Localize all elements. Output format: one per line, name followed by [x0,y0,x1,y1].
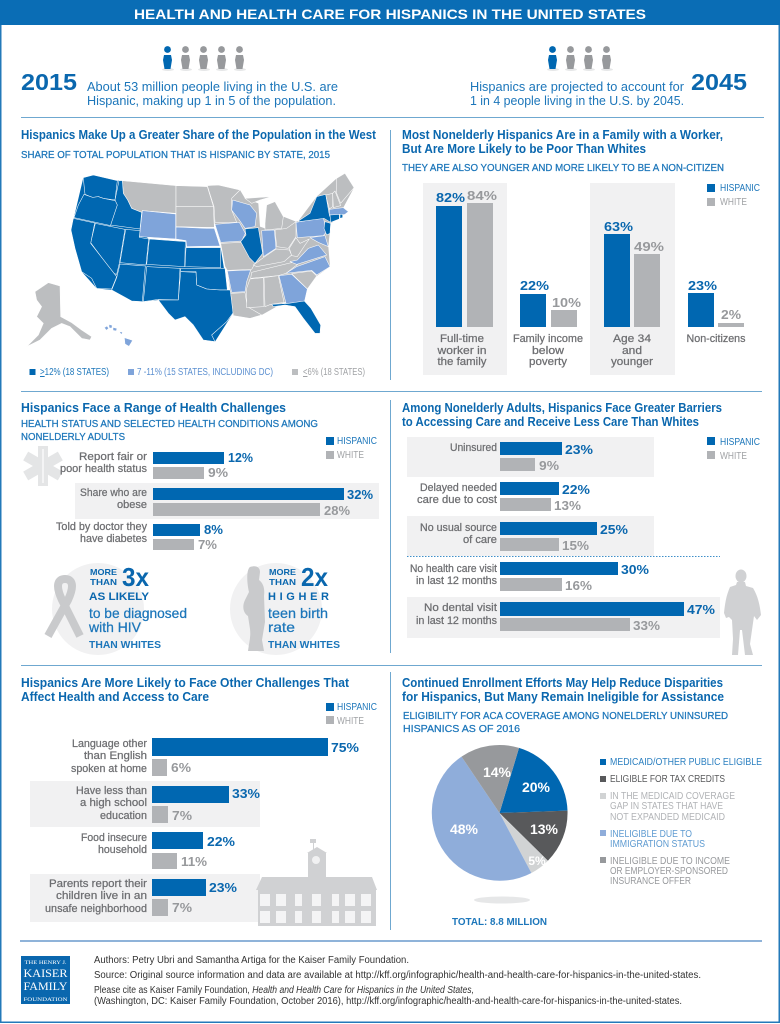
row: unsafe neighborhood: unsafe neighborhood [45,903,147,915]
row: language: 75% [331,740,359,755]
row: no health care visit [410,562,649,593]
credits and source [94,955,701,1007]
bar group: age 34 and younger: Age 34 [613,333,651,345]
callout: teen birth rate [230,562,340,655]
bar group: age 34 and younger: 49% [634,239,664,254]
bar group: non-citizens: Non-citizens [686,333,746,345]
pie legend: IMMIGRATION STATUS [610,839,705,850]
pie legend: INELIGIBLE DUE TO [610,829,692,840]
pie legend: MEDICAID/OTHER PUBLIC ELIGIBLE [610,757,762,768]
bar group: full-time worker: 84% [467,188,497,203]
subheading: ELIGIBILITY FOR ACA COVERAGE AMONG NONELDERLY UNINSURED [403,710,728,722]
bar group: non-citizens: 2% [721,307,741,322]
pie chart: 5% [528,854,546,868]
bar group: age 34 and younger: and [622,345,642,357]
pie legend: GAP IN STATES THAT HAVE [610,801,723,812]
map legend [30,367,365,378]
callout: teen birth rate: 2x [301,562,329,592]
heading: Hispanics Face a Range of Health Challenges [21,400,286,415]
row: delayed care due to cost: 22% [562,482,590,497]
bar group: age 34 and younger: younger [611,356,653,368]
legend: HISPANIC [720,437,760,448]
bar group: family income below poverty [513,278,583,368]
row: obese: 28% [324,503,350,518]
map legend: >12% (18 STATES) [40,367,109,378]
callout: HIV: THAN WHITES [89,639,161,651]
legend [326,436,377,461]
callout: HIV: MORE [90,567,117,577]
row: no dental visit: in last 12 months [416,615,497,627]
logo: Kaiser Family Foundation: KAISER [24,966,68,980]
heading [402,400,722,429]
icon: five people, one highlighted [162,46,246,71]
callout: HIV: AS LIKELY [89,591,150,603]
callout: teen birth rate: THAN WHITES [268,639,340,651]
row: food insecurity: 22% [207,834,235,849]
credits and source: Authors: Petry Ubri and Samantha Artiga for the Kaiser Family Foundation. [94,955,409,966]
heading: Hispanics Make Up a Greater Share of the Population in the West [21,127,377,142]
subheading: NONELDERLY ADULTS [21,431,125,443]
subheading [21,418,318,443]
row: education: 33% [232,786,260,801]
icon: doctor silhouette [724,570,761,655]
row: no usual source of care: 25% [600,522,628,537]
row: diabetes: have diabetes [80,533,147,545]
pie legend: ELIGIBLE FOR TAX CREDITS [610,774,725,785]
heading [21,675,350,704]
callout: HIV [48,562,187,655]
panel: 2045 projection [470,46,747,108]
subheading [403,710,728,735]
legend [326,702,377,727]
footer [21,955,701,1007]
row: no health care visit: 30% [621,562,649,577]
row: food insecurity: household [98,844,147,856]
callout: teen birth rate: MORE [269,567,296,577]
row: no usual source of care: 15% [562,538,589,553]
year 2045: 2045 [691,69,747,95]
callout: HIV: THAN [90,577,117,587]
row: language [71,738,359,776]
row: fair or poor health status: Report fair or [79,451,147,463]
row: no usual source of care: No usual source [420,522,497,534]
bar group: full-time worker: Full-time [440,333,484,345]
bar group: non-citizens: 23% [688,278,717,293]
pie legend [600,757,762,887]
callout: HIV: to be diagnosed [89,605,187,621]
subheading: SHARE OF TOTAL POPULATION THAT IS HISPANIC BY STATE, 2015 [21,149,330,161]
icon: awareness ribbon [48,579,80,636]
callout: teen birth rate: THAN [269,577,296,587]
panel: range of health challenges [21,400,379,655]
heading: Continued Enrollment Efforts May Help Reduce Disparities [402,675,723,690]
callout: teen birth rate: HIGHER [268,591,329,603]
pie chart [432,745,568,881]
title banner: HEALTH AND HEALTH CARE FOR HISPANICS IN THE UNITED STATES [134,6,646,22]
panel: share of population by state [21,127,377,378]
text: 2015 statement [87,79,338,108]
row: no health care visit: No health care visit [410,563,497,575]
text: 2045 statement: 1 in 4 people living in the U.S. by 2045. [470,93,684,108]
row: no dental visit [416,602,715,633]
icon: pregnant silhouette [243,566,265,651]
row: no dental visit: No dental visit [424,602,497,614]
bar group: full-time worker: 82% [436,190,465,205]
row: no health care visit: in last 12 months [416,575,497,587]
heading: for Hispanics, But Many Remain Ineligible for Assistance [402,689,724,704]
credits and source: (Washington, DC: Kaiser Family Foundation, October 2016), http://kff.org/infographic/health-and-health-care-for-hispanics-in-the-united-states. [94,996,682,1007]
row: diabetes: 7% [198,537,217,552]
row: language: Language other [72,738,147,750]
heading [402,675,724,704]
row: language: 6% [171,760,191,775]
heading: But Are More Likely to be Poor Than Whites [402,141,646,156]
logo: Kaiser Family Foundation [21,956,70,1004]
map legend: <6% (18 STATES) [303,367,365,378]
bar group: full-time worker: the family [438,356,487,368]
bar group: family income below poverty: Family income [513,333,583,345]
row: no dental visit: 47% [687,602,715,617]
row: no usual source of care: of care [463,534,497,546]
pie legend: INSURANCE OFFER [610,876,691,887]
row: diabetes: 8% [204,522,223,537]
row: fair or poor health status: 9% [208,465,228,480]
text: 2015 statement: About 53 million people living in the U.S. are [87,79,338,94]
row: uninsured: 9% [539,458,559,473]
year 2015: 2015 [21,69,77,95]
map of the United States [27,173,354,347]
pie legend: OR EMPLOYER-SPONSORED [610,866,728,877]
row: unsafe neighborhood [45,878,237,916]
row: delayed care due to cost [417,482,590,513]
bar group: full-time worker: worker in [436,345,486,357]
legend: HISPANIC [720,183,760,194]
heading: Among Nonelderly Adults, Hispanics Face Greater Barriers [402,400,722,415]
row: food insecurity: 11% [181,854,207,869]
pie shadow [474,896,530,904]
panel: family work and poverty [402,127,760,375]
legend: WHITE [337,716,364,727]
row: no health care visit: 16% [565,578,592,593]
row: delayed care due to cost: Delayed needed [420,482,497,494]
row: uninsured: Uninsured [450,442,497,454]
heading [402,127,723,156]
legend: HISPANIC [337,436,377,447]
row: uninsured: 23% [565,442,593,457]
row: obese [80,487,373,518]
row: uninsured [450,442,593,473]
row: education: a high school [80,797,147,809]
logo: Kaiser Family Foundation: FAMILY [24,979,68,993]
legend [707,183,760,208]
pie chart: 48% [450,821,479,837]
pie chart: 13% [530,821,559,837]
pie legend: INELIGIBLE DUE TO INCOME [610,856,730,867]
bar group: age 34 and younger [604,219,664,368]
title banner [0,0,780,25]
row: unsafe neighborhood: children live in an [56,890,147,902]
row: education: 7% [172,808,192,823]
credits and source: Source: Original source information and data are available at http://kff.org/infographic/health-and-health-care-for-hispanics-in-the-united-states. [94,970,701,981]
callout: HIV: with HIV [88,619,142,635]
logo: Kaiser Family Foundation: FOUNDATION [24,997,68,1003]
row: education: education [100,810,147,822]
row: obese: Share who are [80,487,147,499]
row: fair or poor health status: poor health status [60,463,147,475]
subheading: HISPANICS AS OF 2016 [403,723,520,735]
heading: Most Nonelderly Hispanics Are in a Family with a Worker, [402,127,723,142]
legend: HISPANIC [337,702,377,713]
callout: teen birth rate: rate [268,619,295,635]
callout: teen birth rate: teen birth [268,605,328,621]
text: 2045 statement [470,79,685,108]
legend: WHITE [720,197,747,208]
bar group: full-time worker [436,188,497,368]
row: fair or poor health status: 12% [228,450,253,465]
row: fair or poor health status [60,450,253,480]
row: education [76,785,260,823]
heading: to Accessing Care and Receive Less Care Than Whites [402,414,699,429]
legend: WHITE [720,451,747,462]
panel: barriers to accessing care [402,400,761,655]
row: diabetes [56,521,223,552]
pie chart: 20% [522,779,551,795]
subheading: THEY ARE ALSO YOUNGER AND MORE LIKELY TO BE A NON-CITIZEN [402,162,724,174]
row: delayed care due to cost: care due to cost [417,494,497,506]
bar group: family income below poverty: below [532,345,564,357]
legend [707,437,760,462]
row: language: than English [84,750,147,762]
row: no dental visit: 33% [633,618,660,633]
bar group: family income below poverty: 10% [552,295,581,310]
row: unsafe neighborhood: 23% [209,880,237,895]
row: obese: 32% [347,487,373,502]
panel: 2015 population [21,46,338,108]
row: diabetes: Told by doctor they [56,521,147,533]
icon: four people, one highlighted [547,46,613,71]
row: unsafe neighborhood: Parents report their [49,878,147,890]
text: 2045 statement: Hispanics are projected to account for [470,79,685,94]
icon: school building [256,839,377,926]
pie legend: NOT EXPANDED MEDICAID [610,812,725,823]
panel: enrollment and eligibility [402,675,762,928]
row: food insecurity: Food insecure [81,832,147,844]
bar group: family income below poverty: 22% [520,278,549,293]
row: unsafe neighborhood: 7% [172,900,192,915]
total: TOTAL: 8.8 MILLION [452,916,547,928]
heading: Hispanics Are More Likely to Face Other Challenges That [21,675,350,690]
row: education: Have less than [76,785,147,797]
legend: WHITE [337,450,364,461]
callout: HIV: 3x [122,562,150,592]
icon: star of life [23,446,63,486]
panel: other challenges [21,675,377,926]
row: no usual source of care [420,522,628,553]
row: delayed care due to cost: 13% [554,498,581,513]
pie chart: 14% [483,764,512,780]
row: obese: obese [117,499,147,511]
subheading: HEALTH STATUS AND SELECTED HEALTH CONDITIONS AMONG [21,418,318,430]
credits and source: Please cite as Kaiser Family Foundation, Health and Health Care for Hispanics in the United States, [94,985,474,996]
map legend: 7 -11% (15 STATES, INCLUDING DC) [137,367,273,378]
row: language: spoken at home [71,763,147,775]
bar group: age 34 and younger: 63% [604,219,633,234]
row: food insecurity [81,832,235,869]
heading: Affect Health and Access to Care [21,689,209,704]
text: 2015 statement: Hispanic, making up 1 in 5 of the population. [87,93,336,108]
bar group: family income below poverty: poverty [529,356,568,368]
bar group: non-citizens [686,278,746,345]
logo: Kaiser Family Foundation: THE HENRY J. [24,960,67,966]
pie legend: IN THE MEDICAID COVERAGE [610,791,735,802]
